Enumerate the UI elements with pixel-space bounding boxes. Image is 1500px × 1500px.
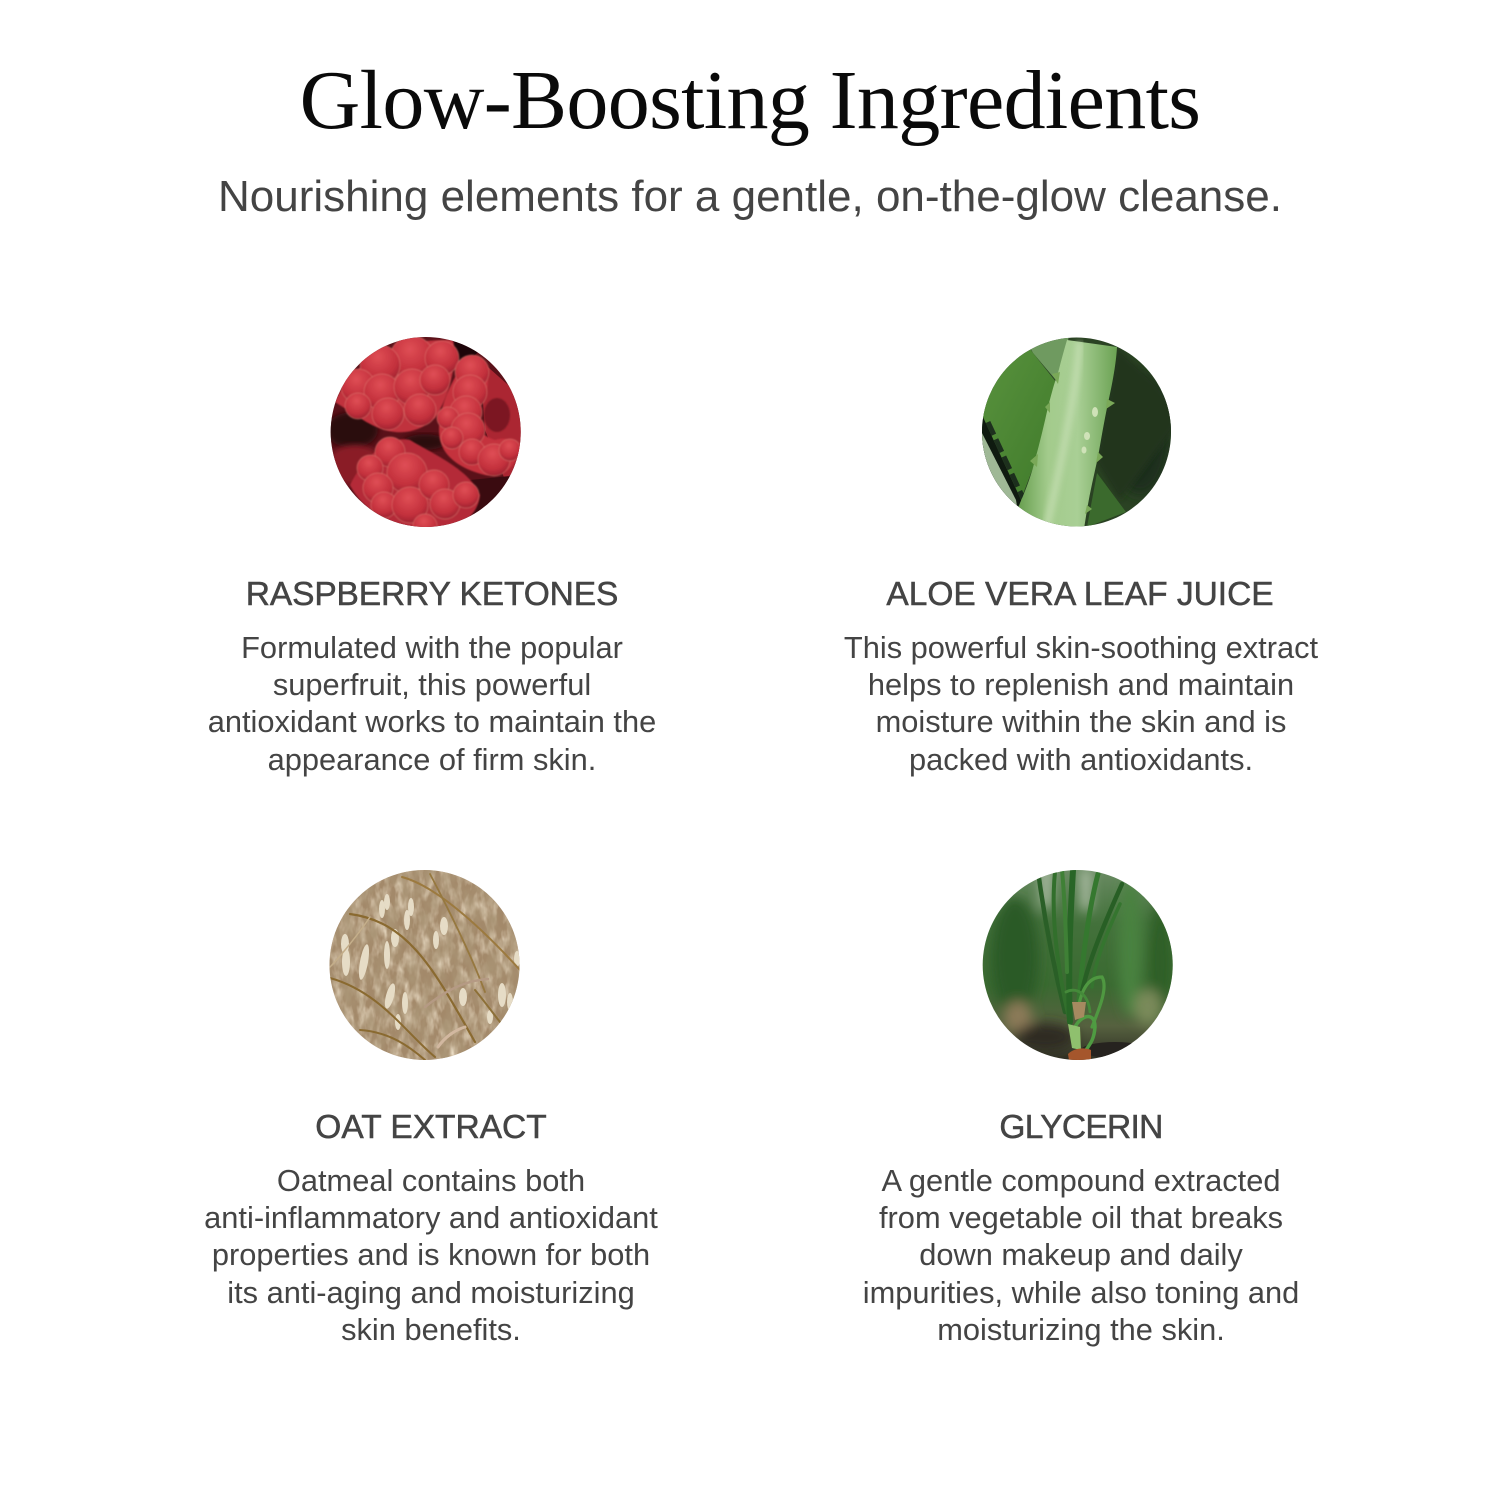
text: glycerin description: down makeup and daily <box>919 1237 1243 1272</box>
text: oat extract description: Oatmeal contains both <box>277 1163 585 1198</box>
icon: green plant <box>982 870 1173 1060</box>
text: oat extract description: properties and is known for both <box>212 1237 650 1272</box>
text: aloe vera description: moisture within the skin and is <box>876 704 1286 739</box>
text: glycerin description: impurities, while also toning and <box>863 1275 1299 1310</box>
text: oat extract description: skin benefits. <box>341 1312 521 1347</box>
heading: aloe vera leaf juice: ALOE VERA LEAF JUICE <box>886 576 1274 613</box>
text: oat extract description <box>204 1163 658 1347</box>
text: raspberry ketones description: appearance of firm skin. <box>268 742 596 777</box>
icon: raspberries <box>330 337 521 527</box>
heading: glycerin: GLYCERIN <box>999 1109 1163 1146</box>
text: raspberry ketones description: superfruit, this powerful <box>273 667 591 702</box>
text: glycerin description: moisturizing the skin. <box>937 1312 1225 1347</box>
text: aloe vera description <box>844 630 1318 777</box>
text: glycerin description: from vegetable oil that breaks <box>879 1200 1283 1235</box>
subtitle: Nourishing elements for a gentle, on-the-glow cleanse. <box>218 172 1282 221</box>
text: raspberry ketones description: antioxidant works to maintain the <box>208 704 656 739</box>
icon: aloe vera <box>982 338 1171 526</box>
text: aloe vera description: packed with antioxidants. <box>909 742 1253 777</box>
text: raspberry ketones description: Formulated with the popular <box>241 630 623 665</box>
text: aloe vera description: helps to replenish and maintain <box>868 667 1294 702</box>
text: raspberry ketones description <box>208 630 656 777</box>
text: aloe vera description: This powerful skin-soothing extract <box>844 630 1318 665</box>
heading: raspberry ketones: RASPBERRY KETONES <box>246 576 618 613</box>
title: Glow-Boosting Ingredients <box>300 54 1200 147</box>
icon: oat field <box>330 870 520 1060</box>
text: glycerin description: A gentle compound extracted <box>882 1163 1280 1198</box>
text: oat extract description: anti-inflammatory and antioxidant <box>204 1200 658 1235</box>
text: glycerin description <box>863 1163 1299 1347</box>
text: oat extract description: its anti-aging and moisturizing <box>227 1275 635 1310</box>
heading: oat extract: OAT EXTRACT <box>315 1109 547 1146</box>
